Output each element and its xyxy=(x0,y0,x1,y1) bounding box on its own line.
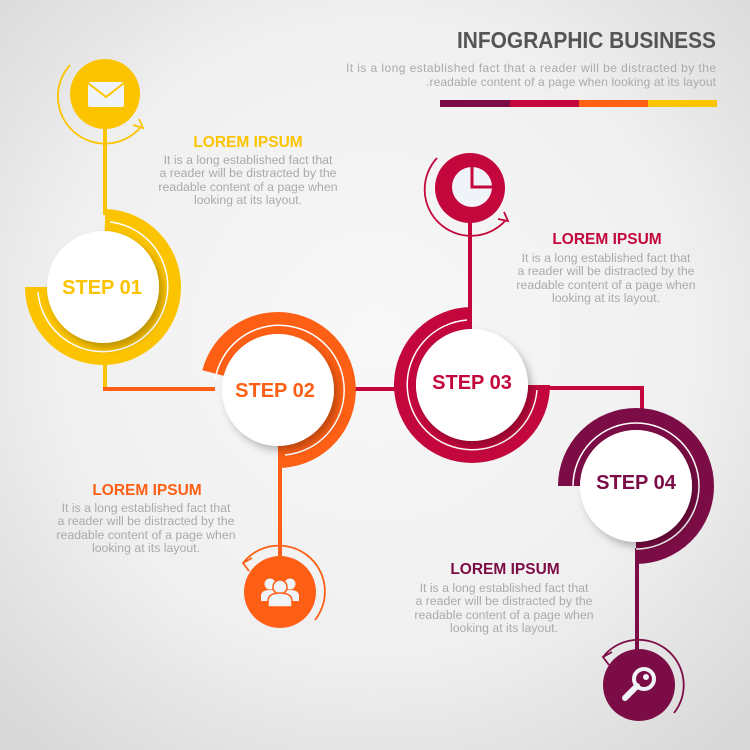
text block 4 xyxy=(414,561,594,635)
text block 1: readable content of a page when xyxy=(158,180,338,194)
text block 3: a reader will be distracted by the xyxy=(517,264,695,278)
text block 2 xyxy=(56,482,236,555)
text block 1 xyxy=(158,134,338,207)
step 01 xyxy=(36,220,170,354)
text block 4: LOREM IPSUM xyxy=(450,561,560,578)
text block 1: a reader will be distracted by the xyxy=(159,166,337,180)
text block 1: LOREM IPSUM xyxy=(193,134,303,151)
icon: people xyxy=(243,546,325,628)
text block 3: looking at its layout. xyxy=(552,291,660,305)
step 02 xyxy=(213,323,345,457)
text block 2: readable content of a page when xyxy=(56,528,236,542)
text block 1: It is a long established fact that xyxy=(164,153,333,167)
text block 2: It is a long established fact that xyxy=(62,501,231,515)
step 02: STEP 02 xyxy=(235,380,315,402)
text block 3: LOREM IPSUM xyxy=(552,231,662,248)
icon: magnifier xyxy=(603,640,684,721)
step 04: STEP 04 xyxy=(596,472,677,494)
subtitle: .readable content of a page when looking at its layout xyxy=(426,75,717,89)
icon: envelope xyxy=(58,59,143,144)
step 03: STEP 03 xyxy=(432,372,512,394)
text block 3: It is a long established fact that xyxy=(522,251,691,265)
text block 4: looking at its layout. xyxy=(450,621,558,635)
step 03 xyxy=(405,318,539,452)
text block 2: looking at its layout. xyxy=(92,541,200,555)
text block 4: readable content of a page when xyxy=(414,608,594,622)
subtitle: It is a long established fact that a reader will be distracted by the xyxy=(346,61,716,75)
subtitle xyxy=(346,61,717,89)
text block 3 xyxy=(516,231,696,305)
text block 2: LOREM IPSUM xyxy=(92,482,202,499)
step 04 xyxy=(569,419,703,553)
color bar xyxy=(440,100,717,107)
icon: pie chart xyxy=(425,153,508,236)
text block 3: readable content of a page when xyxy=(516,278,696,292)
connector lines xyxy=(103,128,642,655)
text block 2: a reader will be distracted by the xyxy=(57,514,235,528)
text block 1: looking at its layout. xyxy=(194,193,302,207)
text block 4: a reader will be distracted by the xyxy=(415,594,593,608)
step 01: STEP 01 xyxy=(62,277,142,299)
title: INFOGRAPHIC BUSINESS xyxy=(457,27,716,53)
text block 4: It is a long established fact that xyxy=(420,581,589,595)
